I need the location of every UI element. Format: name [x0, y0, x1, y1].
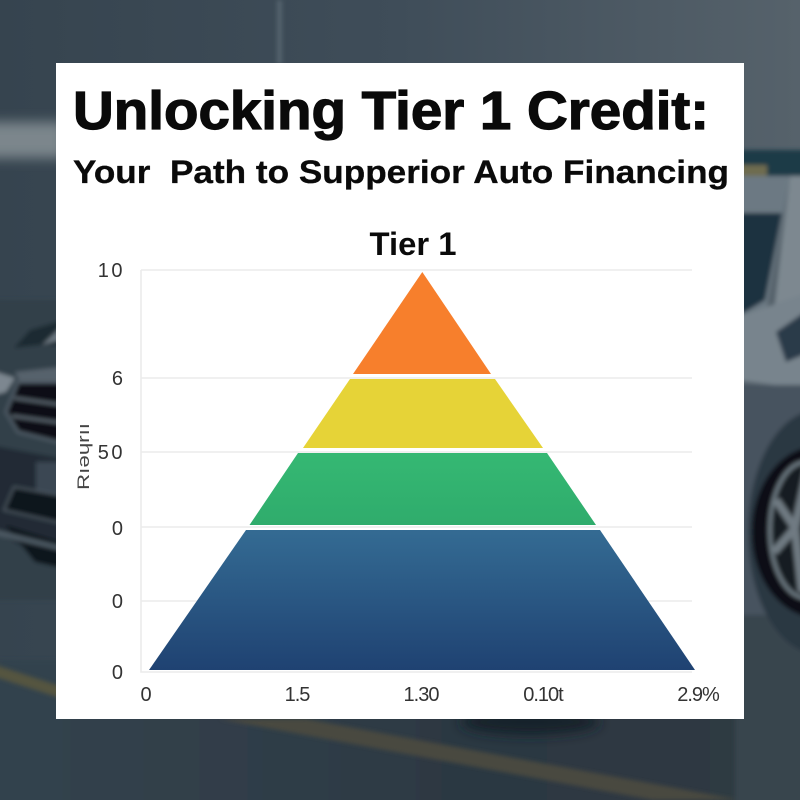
y axis tick labels: 0 — [112, 662, 123, 684]
x axis tick labels: 0.10t — [523, 684, 564, 706]
chart heading: Tier 1 — [370, 226, 456, 262]
subtitle: Your Path to Supperior Auto Financing — [73, 154, 729, 190]
pyramid tier: blue base — [149, 530, 695, 670]
y axis tick labels: 0 — [112, 591, 123, 613]
y axis tick labels — [98, 260, 125, 684]
y axis tick labels: 10 — [98, 260, 125, 282]
y axis tick labels: 6 — [112, 368, 123, 390]
x axis tick labels: 0 — [140, 684, 152, 706]
panel: white card — [56, 63, 744, 719]
x axis tick labels: 2.9% — [677, 684, 720, 706]
x axis tick labels — [140, 684, 720, 706]
pyramid tier: green — [250, 453, 596, 525]
pyramid tier: yellow — [303, 379, 543, 448]
car front, left side — [0, 300, 70, 600]
axes and grid lines — [141, 270, 692, 672]
y axis tick labels: 50 — [98, 442, 125, 464]
title: Unlocking Tier 1 Credit: — [73, 81, 709, 141]
pyramid tier: orange top — [353, 272, 491, 374]
car side, right side — [735, 150, 800, 800]
y axis title: Rıəɥrıı — [74, 423, 93, 490]
y axis tick labels: 0 — [112, 518, 123, 540]
x axis tick labels: 1.30 — [404, 684, 439, 706]
chart: pyramid on axes — [74, 260, 720, 706]
x axis tick labels: 1.5 — [285, 684, 310, 706]
